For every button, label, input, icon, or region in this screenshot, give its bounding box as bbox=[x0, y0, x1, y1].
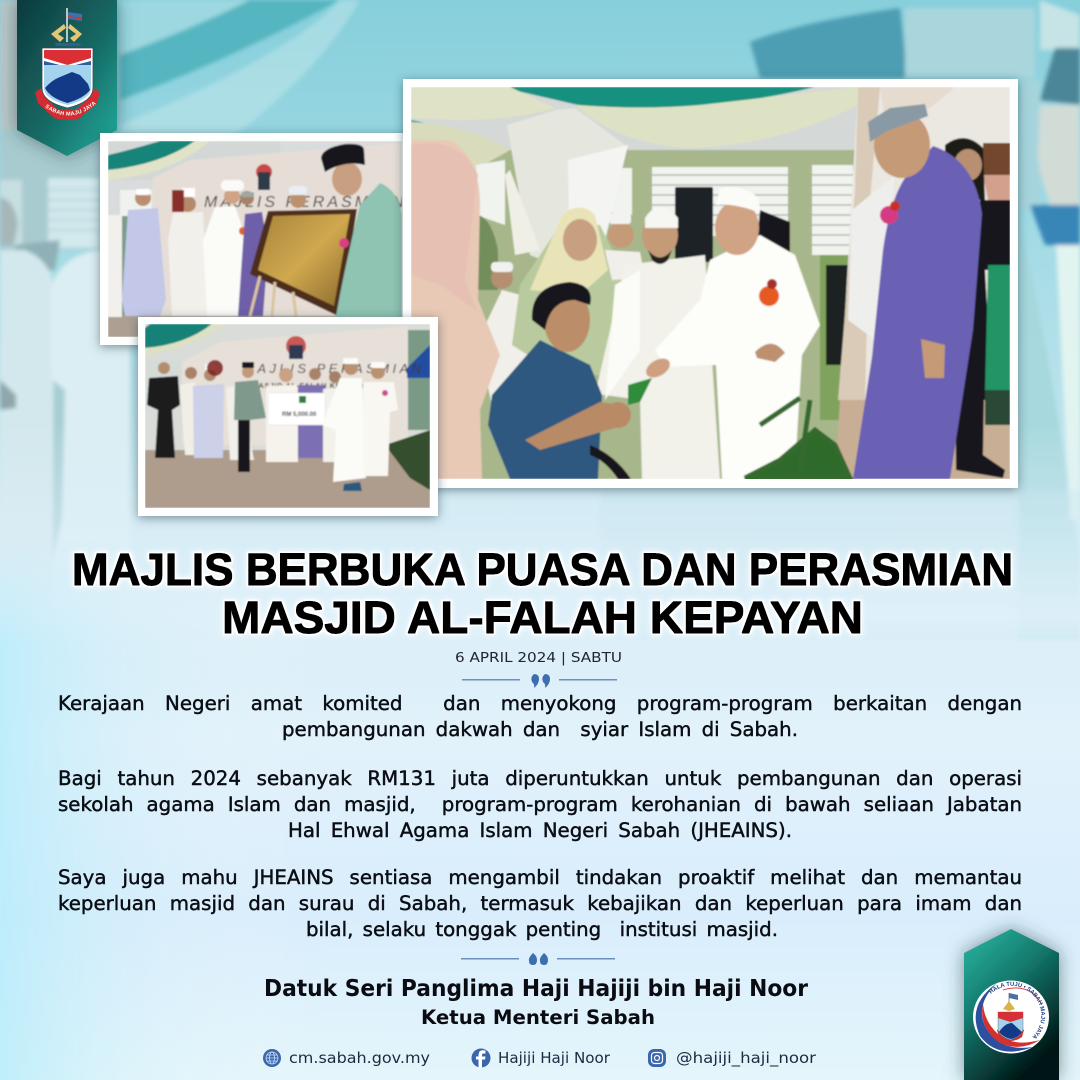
photo frame: cheque presentation bbox=[138, 317, 438, 516]
paragraph 3 bbox=[58, 866, 1022, 941]
text: Hal Ehwal Agama Islam Negeri Sabah (JHEAINS). bbox=[288, 819, 792, 842]
banner: Hala Tuju logo bbox=[950, 918, 1072, 1080]
photo frame: plaque signing bbox=[100, 133, 410, 345]
photo frame: main photo bbox=[403, 79, 1018, 488]
contact: facebook: Hajiji Haji Noor bbox=[498, 1049, 611, 1067]
title bbox=[72, 544, 1013, 643]
photo: group holding mock cheque: MAJLIS PERASMIAN bbox=[243, 361, 425, 376]
icon: globe bbox=[263, 1049, 281, 1067]
contact: website: cm.sabah.gov.my bbox=[289, 1049, 430, 1067]
text: keperluan masjid dan surau di Sabah, termasuk kebajikan dan keperluan para imam dan bbox=[58, 892, 1022, 915]
text: bilal, selaku tonggak penting institusi masjid. bbox=[306, 918, 778, 941]
banner: Sabah state crest bbox=[4, 0, 130, 166]
paragraph 1 bbox=[58, 692, 1022, 741]
quote divider bbox=[462, 674, 617, 688]
text: sekolah agama Islam dan masjid, program-program kerohanian di bawah seliaan Jabatan bbox=[58, 793, 1022, 816]
title: MAJLIS BERBUKA PUASA DAN PERASMIAN bbox=[72, 544, 1013, 595]
photo: group holding mock cheque: RM 5,000.00 bbox=[282, 412, 317, 418]
photo: minister signing plaque bbox=[108, 141, 407, 337]
speaker name: Datuk Seri Panglima Haji Hajiji bin Haji Noor bbox=[264, 976, 809, 1002]
icon: Sabah coat of arms bbox=[35, 8, 100, 120]
contact: instagram: @hajiji_haji_noor bbox=[676, 1049, 817, 1068]
logo: Hala Tuju Sabah Maju Jaya bbox=[973, 980, 1049, 1054]
logo: Hala Tuju Sabah Maju Jaya: HALA TUJU • SABAH MAJU JAYA bbox=[988, 982, 1046, 1038]
icon: Sabah coat of arms: SABAH MAJU JAYA bbox=[45, 102, 96, 116]
speaker role: Ketua Menteri Sabah bbox=[421, 1006, 655, 1029]
attribution divider bbox=[461, 953, 615, 965]
photo: Chief Minister handing envelope to man in wheelchair bbox=[411, 87, 1010, 479]
paragraph 2 bbox=[58, 767, 1022, 842]
photo: minister signing plaque: MAJLIS PERASMIAN bbox=[204, 194, 407, 211]
icon: facebook bbox=[472, 1048, 490, 1068]
text: Kerajaan Negeri amat komited dan menyokong program-program berkaitan dengan bbox=[58, 692, 1022, 715]
text: Bagi tahun 2024 sebanyak RM131 juta diperuntukkan untuk pembangunan dan operasi bbox=[58, 767, 1022, 790]
photo: group holding mock cheque bbox=[145, 324, 430, 508]
photo: group holding mock cheque: MASJID AL-FALAH KEPAYAN bbox=[252, 383, 368, 390]
text: Saya juga mahu JHEAINS sentiasa mengambil tindakan proaktif melihat dan memantau bbox=[58, 866, 1022, 889]
text: pembangunan dakwah dan syiar Islam di Sabah. bbox=[282, 718, 798, 741]
icon: instagram bbox=[648, 1049, 666, 1067]
title: MASJID AL-FALAH KEPAYAN bbox=[222, 592, 863, 643]
date line: 6 APRIL 2024 | SABTU bbox=[455, 650, 622, 666]
